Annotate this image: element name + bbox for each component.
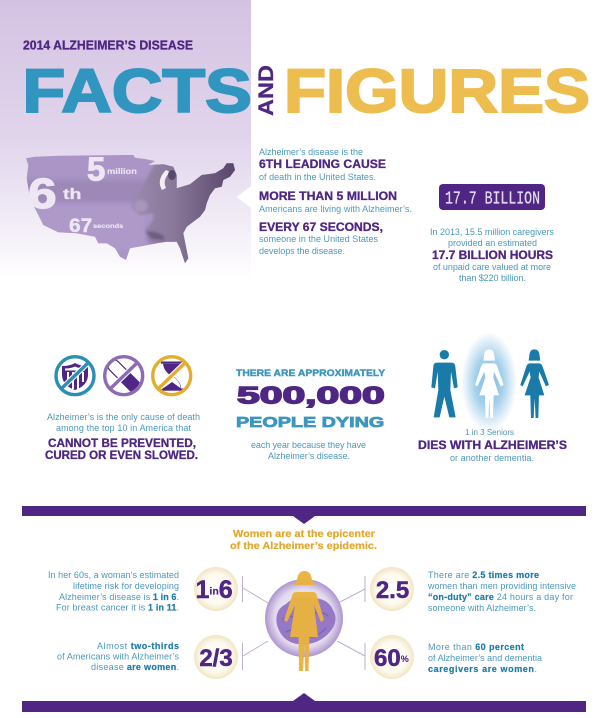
stat circle: 2/3: 2/3 bbox=[199, 645, 233, 672]
text block: 2.5 times more bbox=[427, 570, 576, 613]
text block: 500,000 people dying: PEOPLE DYING bbox=[236, 413, 384, 430]
stat circle: 1 in 6: in bbox=[209, 586, 219, 598]
icon: man bbox=[431, 350, 458, 417]
icon: woman bbox=[520, 349, 549, 418]
heading: women: Women are at the epicenter bbox=[233, 529, 375, 540]
map label: 5 million: million bbox=[107, 167, 137, 176]
text block: 1 in 6 risk: In her 60s, a woman’s estimated bbox=[48, 570, 179, 580]
text block: caregivers: provided an estimated bbox=[448, 238, 537, 248]
text block: cannot be prevented: among the top 10 in America that bbox=[56, 423, 191, 433]
text block: key statistics: someone in the United States bbox=[259, 234, 378, 244]
stat circle: 60% bbox=[370, 635, 414, 679]
text block: dies with Alzheimer's: 1 in 3 Seniors bbox=[465, 427, 514, 437]
text block: key statistics: Alzheimer’s disease is the bbox=[259, 147, 363, 157]
text block: key statistics: 6TH LEADING CAUSE bbox=[259, 159, 386, 171]
glow behind highlighted woman bbox=[461, 332, 517, 432]
text block: key statistics: Americans are living with Alzheimer’s. bbox=[259, 204, 412, 214]
text block: 1 in 6 risk: For breast cancer it is 1 in 11. bbox=[56, 602, 179, 612]
text block: 1 in 6 risk: lifetime risk for developing bbox=[73, 581, 179, 591]
text block: caregivers: of unpaid care valued at more bbox=[433, 262, 551, 272]
map label: 5 million bbox=[87, 150, 137, 188]
title: figures: FIGURES bbox=[284, 57, 590, 125]
icon: crossed-out hourglass bbox=[153, 357, 191, 395]
map label: 6th: 6 bbox=[28, 170, 57, 218]
text block: 60 percent bbox=[428, 642, 542, 674]
text block: dies with Alzheimer's: or another dementia. bbox=[450, 453, 534, 463]
top bar with arrow bbox=[22, 506, 586, 524]
map label: 5 million: 5 bbox=[87, 150, 105, 188]
title: and: AND bbox=[255, 65, 278, 116]
text block: 500,000 people dying: Alzheimer’s disease. bbox=[268, 451, 350, 461]
text block: cannot be prevented: CANNOT BE PREVENTED, bbox=[48, 438, 196, 450]
stat circle: 60%: % bbox=[401, 654, 409, 664]
text block: two-thirds: of Americans with Alzheimer’s bbox=[57, 652, 180, 662]
text block: key statistics: develops the disease. bbox=[259, 246, 345, 256]
text block: 60 percent: More than 60 percent bbox=[428, 642, 524, 652]
woman silhouette bbox=[284, 571, 324, 671]
text block: 1 in 6 risk bbox=[48, 570, 179, 612]
text block: key statistics: of death in the United States. bbox=[259, 172, 376, 182]
text block: 60 percent: caregivers are women. bbox=[428, 664, 537, 674]
text block: cannot be prevented: CURED OR EVEN SLOWED. bbox=[45, 450, 198, 462]
connector lines bbox=[242, 576, 365, 670]
icon: highlighted woman bbox=[475, 349, 504, 418]
icon: crossed-out pill bbox=[105, 357, 143, 395]
text block: 1 in 6 risk: Alzheimer’s disease is 1 in 6. bbox=[59, 592, 179, 602]
text block: caregivers: than $220 billion. bbox=[459, 273, 526, 283]
text block: two-thirds: disease are women. bbox=[91, 662, 179, 672]
text block: dies with Alzheimer's bbox=[418, 427, 567, 463]
text block: two-thirds: Almost two-thirds bbox=[97, 641, 179, 651]
stat circle: 2/3 bbox=[194, 635, 238, 679]
subtitle: 2014 ALZHEIMER’S DISEASE bbox=[23, 38, 193, 52]
text block: 60 percent: of Alzheimer’s and dementia bbox=[428, 653, 542, 663]
map label: 67 seconds: seconds bbox=[93, 223, 123, 230]
text block: 500,000 people dying bbox=[236, 368, 386, 461]
digital display: 17.7 billion bbox=[439, 184, 545, 210]
map label: 67 seconds bbox=[69, 216, 123, 237]
map label: 67 seconds: 67 bbox=[69, 216, 92, 237]
text block: caregivers bbox=[430, 227, 554, 283]
text block: 2.5 times more: There are 2.5 times more bbox=[428, 570, 539, 580]
text block: two-thirds bbox=[57, 641, 180, 672]
brain bbox=[276, 597, 336, 644]
text block: 500,000 people dying: 500,000 bbox=[237, 383, 385, 409]
text block: dies with Alzheimer's: DIES WITH ALZHEIMER’S bbox=[418, 440, 567, 452]
text block: 2.5 times more: someone with Alzheimer’s. bbox=[428, 603, 536, 613]
text block: caregivers: 17.7 BILLION HOURS bbox=[432, 250, 553, 262]
text block: key statistics: MORE THAN 5 MILLION bbox=[259, 191, 397, 203]
text block: 2.5 times more: women than men providing intensive bbox=[427, 581, 576, 591]
background panel bbox=[0, 0, 251, 280]
text block: caregivers: In 2013, 15.5 million caregivers bbox=[430, 227, 554, 237]
stat circle: 1 in 6: 6 bbox=[219, 576, 233, 604]
text block: key statistics: EVERY 67 SECONDS, bbox=[259, 222, 383, 234]
stat circle: 1 in 6: 1 bbox=[196, 576, 209, 604]
text block: 500,000 people dying: THERE ARE APPROXIMATELY bbox=[236, 368, 386, 379]
title: facts: FACTS bbox=[22, 56, 252, 125]
heading: women: of the Alzheimer’s epidemic. bbox=[230, 541, 377, 552]
text block: cannot be prevented: Alzheimer’s is the only cause of death bbox=[47, 412, 200, 422]
stat circle: 2.5: 2.5 bbox=[376, 577, 409, 604]
text block: key statistics bbox=[259, 147, 412, 256]
sphere with brain and woman bbox=[265, 571, 343, 671]
bottom bar with arrow bbox=[22, 693, 586, 712]
heading: women bbox=[230, 529, 377, 552]
icon: crossed-out shield bbox=[56, 357, 94, 395]
text block: 2.5 times more: “on-duty” care 24 hours a day for bbox=[428, 592, 573, 602]
text block: 500,000 people dying: each year because they have bbox=[251, 440, 366, 450]
map label: 6th bbox=[28, 170, 81, 218]
digital display: 17.7 billion: 17.7 BILLION bbox=[445, 190, 540, 210]
text block: cannot be prevented bbox=[45, 412, 200, 462]
map of the United States with face bbox=[26, 155, 235, 264]
stat circle: 1 in 6 bbox=[194, 567, 238, 611]
stat circle: 2.5 bbox=[370, 567, 414, 611]
callout notch bbox=[236, 186, 251, 208]
map label: 6th: th bbox=[63, 185, 81, 202]
stat circle: 60%: 60 bbox=[374, 645, 401, 672]
